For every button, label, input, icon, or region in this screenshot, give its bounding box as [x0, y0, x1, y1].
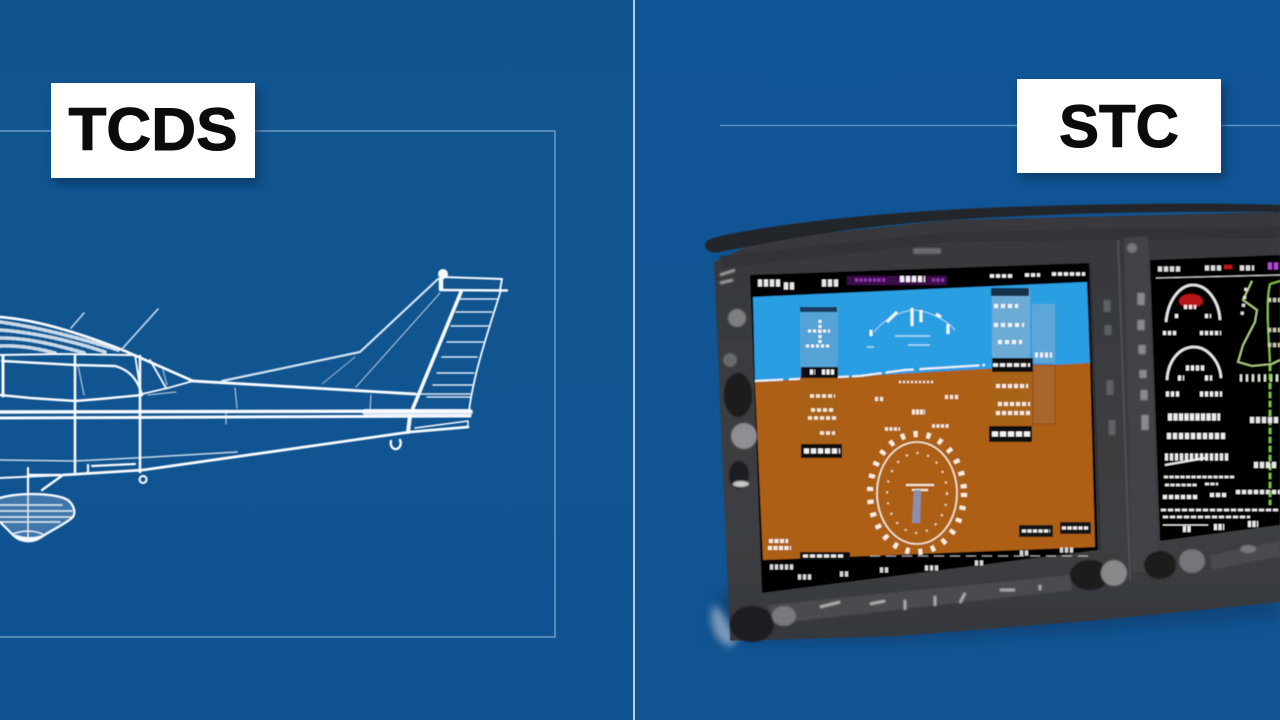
avionics shadow: [712, 590, 1280, 644]
label: STC: STC: [1059, 93, 1179, 160]
horizon line: [755, 365, 985, 381]
sky: [753, 282, 1090, 382]
blueprint frame: [0, 131, 555, 637]
ground: [755, 363, 1095, 560]
engine gauges: [1163, 285, 1222, 394]
left bezel controls: [720, 270, 757, 489]
airspeed tape: [800, 307, 842, 458]
top lip: [705, 204, 1280, 253]
screen base: [750, 263, 1098, 593]
bezel body: [714, 212, 1280, 641]
second bezel controls: [1107, 236, 1280, 579]
softkey labels: [770, 550, 1092, 577]
centre seam: [1118, 240, 1130, 580]
tail skid: [391, 416, 468, 449]
map: [1238, 281, 1280, 505]
panel divider: [633, 0, 635, 720]
engine readouts: [1161, 417, 1280, 529]
label: TCDS: [51, 83, 259, 184]
top status bar: [758, 274, 1085, 286]
canopy: [0, 317, 193, 381]
altitude tape: [989, 288, 1055, 442]
label: STC: [1017, 79, 1225, 179]
tail fin: [222, 269, 507, 411]
STC guide line: [720, 124, 1280, 126]
cabin windows: [0, 355, 193, 401]
main wheel: [0, 468, 74, 541]
primary flight display: [750, 263, 1098, 593]
top band: [720, 226, 1280, 268]
fuselage structure: [0, 356, 470, 483]
multifunction display: [1150, 255, 1280, 541]
aircraft blueprint drawing: [0, 269, 507, 541]
avionics display unit: [705, 204, 1280, 647]
ground readouts: [875, 382, 958, 429]
attitude arc: [867, 308, 955, 347]
bottom softkey row: [730, 560, 1127, 642]
maker label: [913, 248, 941, 254]
white smear: [711, 604, 738, 647]
status bar: [1156, 266, 1280, 278]
compass rose: [870, 434, 964, 552]
screen base: [1150, 255, 1280, 541]
lower readouts: [768, 522, 1091, 560]
antennas: [71, 309, 158, 349]
label: TCDS: TCDS: [68, 96, 238, 163]
